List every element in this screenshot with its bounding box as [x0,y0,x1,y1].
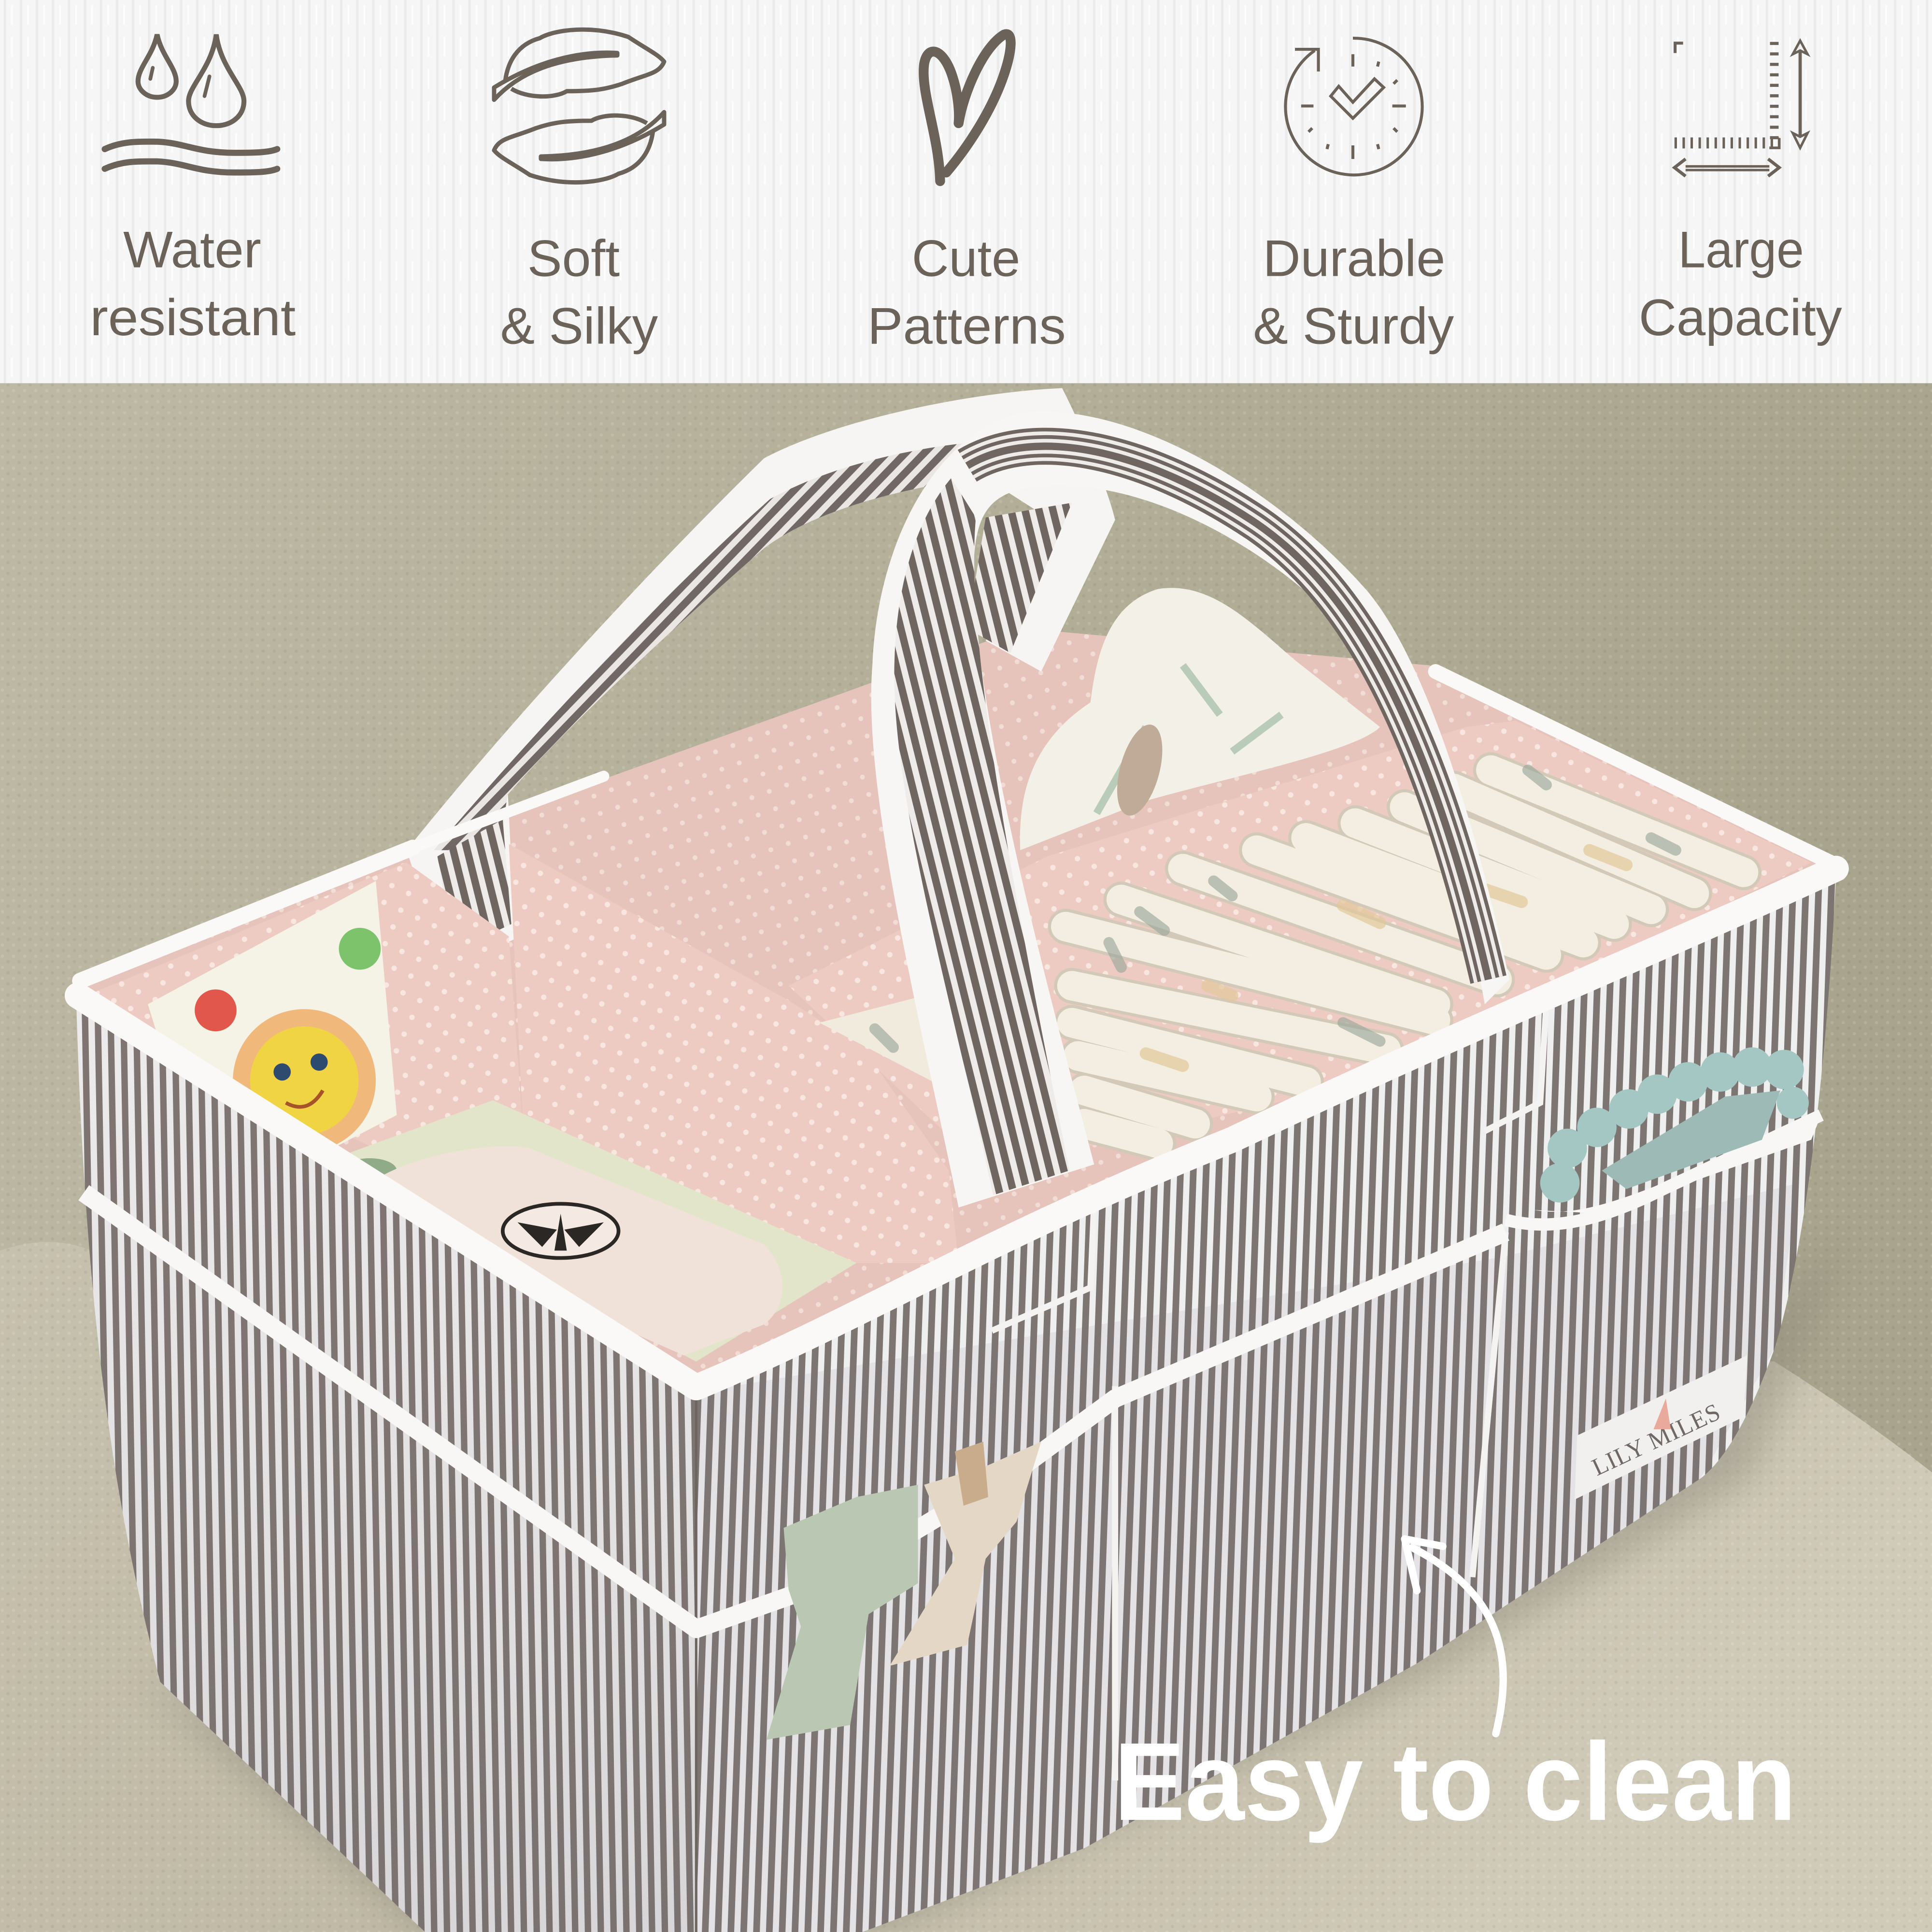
label: cute patterns [867,229,1066,355]
front handle [871,412,1509,1208]
label: soft and silky [500,229,658,355]
feature labels [90,221,1842,355]
label: cute patterns: Patterns [867,297,1066,355]
icon: capacity ruler and arrows [1675,41,1807,176]
label: large capacity: Capacity [1639,288,1842,346]
clip [955,1442,988,1506]
label: water resistant: resistant [90,288,296,346]
label: soft and silky: Soft [527,229,620,287]
basket shadow [136,1232,1848,1932]
sun activity card [148,881,397,1165]
label: durable and sturdy: & Sturdy [1253,297,1454,355]
back handle [407,388,1115,971]
arrow to fabric [1405,1539,1503,1733]
swaddle blanket [1020,588,1380,850]
label: durable and sturdy [1253,229,1454,355]
brand label [1575,1355,1747,1500]
label: soft and silky: & Silky [500,297,658,355]
basket front face: striped fabric [696,877,1836,1932]
icon: feathers [494,29,664,183]
label: water resistant [90,221,296,346]
photo: sofa back [0,383,1932,1492]
wipes pack with lid [318,1100,856,1362]
brand label: LILY MILES [1588,1398,1724,1481]
header band: linen background [0,0,1932,383]
label: durable and sturdy: Durable [1263,229,1445,287]
icon: heart [923,34,1011,181]
logo on wipes lid [503,1204,619,1258]
seams and tab details on front face [992,1004,1547,1780]
label: large capacity: Large [1678,221,1804,279]
basket interior lining [76,628,1836,1387]
pink divider panel [509,844,959,1263]
label: cute patterns: Cute [912,229,1020,287]
beige bow [890,1442,1041,1666]
label: water resistant: Water [123,221,261,279]
diaper strip far left [819,995,986,1183]
basket left face: striped fabric [76,1004,696,1932]
icon: clock with check [1285,38,1422,175]
hair bows on clips [767,1442,1041,1740]
photo: sofa seat [0,1232,1932,1932]
top rim binding [78,671,1836,1387]
diapers [819,770,1744,1183]
label: large capacity [1639,221,1842,346]
icon: water drops and waves [105,34,277,172]
callout: easy to clean: Easy to clean [1114,1719,1796,1844]
left compartment wall [92,863,524,1146]
teether toy in pocket [1534,1047,1821,1214]
pocket binding band [84,1115,1821,1629]
right compartment lining [789,721,1811,1170]
green bow [767,1485,918,1740]
